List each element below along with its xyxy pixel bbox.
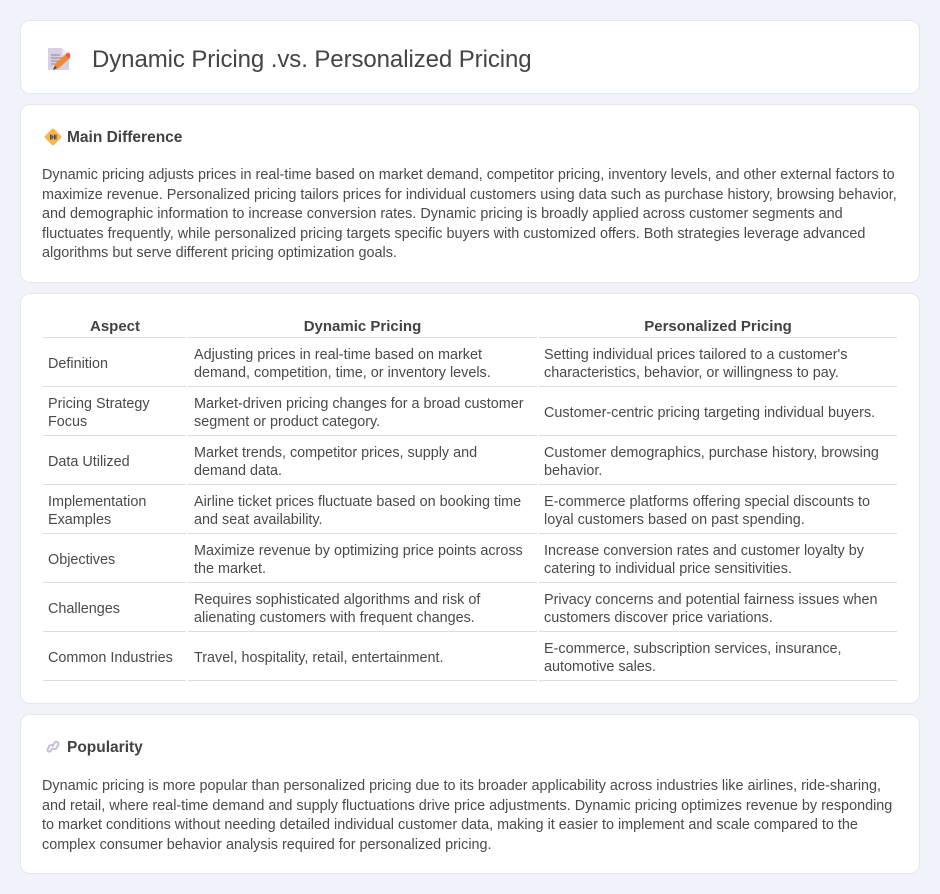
- table row: implementation examples: Implementation: [48, 494, 146, 510]
- table row: challenges: alienating customers with frequent changes.: [194, 610, 475, 626]
- table row: data utilized: Data Utilized: [48, 454, 130, 470]
- text block: main difference paragraph: [42, 167, 897, 261]
- text block: popularity paragraph: complex consumer behavior analysis required for personalized pricing.: [42, 836, 492, 852]
- panel: title header: [20, 20, 920, 94]
- text block: main difference paragraph: algorithms but serve different pricing optimization goals.: [42, 245, 397, 261]
- table row: pricing strategy focus: Pricing Strategy: [48, 396, 150, 412]
- table row: data utilized: behavior.: [544, 463, 602, 479]
- table header row: Aspect: [90, 318, 140, 335]
- table row: definition: Adjusting prices in real-time based on market: [194, 347, 482, 363]
- heading: popularity: Popularity: [67, 739, 143, 756]
- table header row: Dynamic Pricing: [304, 318, 421, 335]
- table row: implementation examples: [48, 494, 870, 528]
- text block: popularity paragraph: [42, 778, 892, 852]
- table row: implementation examples: Airline ticket prices fluctuate based on booking time: [194, 494, 521, 510]
- heading: main difference: Main Difference: [67, 129, 182, 146]
- table row: data utilized: demand data.: [194, 463, 282, 479]
- table row: definition: [48, 347, 848, 381]
- table header row: Personalized Pricing: [644, 318, 792, 335]
- table row: common industries: [48, 641, 842, 675]
- table row: implementation examples: E-commerce platforms offering special discounts to: [544, 494, 870, 510]
- table row: common industries: Travel, hospitality, retail, entertainment.: [194, 650, 444, 666]
- table row: data utilized: Customer demographics, purchase history, browsing: [544, 445, 879, 461]
- table row: objectives: Increase conversion rates and customer loyalty by: [544, 543, 864, 559]
- panel: comparison table: [20, 293, 920, 704]
- text block: main difference paragraph: and demographic information to increase conversion rates. Dynamic pricing is broadly applied across customer segments and: [42, 206, 843, 222]
- text block: popularity paragraph: to market conditions without needing detailed individual customer data, making it easier to implement and scale compared to the: [42, 817, 858, 833]
- table row: definition: Setting individual prices tailored to a customer's: [544, 347, 848, 363]
- table row: objectives: the market.: [194, 561, 266, 577]
- panel: popularity: [20, 714, 920, 874]
- text block: popularity paragraph: and retail, where real-time demand and supply fluctuations drive price adjustments. Dynamic pricing optimizes revenue by responding: [42, 798, 892, 814]
- text block: popularity paragraph: Dynamic pricing is more popular than personalized pricing due to its broader applicability across industries like airlines, ride-sharing,: [42, 778, 881, 794]
- panel: main difference: [20, 104, 920, 283]
- text block: main difference paragraph: fluctuates frequently, while personalized pricing targets specific buyers with customized offers. Both strategies leverage advanced: [42, 226, 865, 242]
- title: Dynamic Pricing .vs. Personalized Pricing: [92, 46, 532, 73]
- text block: main difference paragraph: Dynamic pricing adjusts prices in real-time based on market demand, competitor pricing, inventory levels, and other external factors to: [42, 167, 895, 183]
- table row: objectives: Objectives: [48, 552, 115, 568]
- icon: document with pencil: [48, 48, 70, 70]
- table row: implementation examples: Examples: [48, 512, 111, 528]
- table row: challenges: [48, 592, 878, 626]
- table row: objectives: catering to individual price sensitivities.: [544, 561, 792, 577]
- table row: common industries: automotive sales.: [544, 659, 656, 675]
- table row: challenges: Requires sophisticated algorithms and risk of: [194, 592, 480, 608]
- table row: definition: Definition: [48, 356, 108, 372]
- table row: pricing strategy focus: Market-driven pricing changes for a broad customer: [194, 396, 524, 412]
- table row: objectives: Maximize revenue by optimizing price points across: [194, 543, 523, 559]
- table row: pricing strategy focus: segment or product category.: [194, 414, 380, 430]
- table row: data utilized: Market trends, competitor prices, supply and: [194, 445, 477, 461]
- table row: common industries: Common Industries: [48, 650, 173, 666]
- table header row: [90, 318, 792, 335]
- table row: definition: characteristics, behavior, or willingness to pay.: [544, 365, 839, 381]
- icon: chain link: [46, 740, 60, 753]
- icon: diamond warning sign: [44, 128, 62, 146]
- table row: pricing strategy focus: [48, 396, 875, 430]
- table row: implementation examples: and seat availability.: [194, 512, 323, 528]
- table row: challenges: customers discover price variations.: [544, 610, 773, 626]
- text block: main difference paragraph: maximize revenue. Personalized pricing tailors prices for individual customers using data such as purchase history, browsing behavior,: [42, 186, 897, 202]
- table row: challenges: Privacy concerns and potential fairness issues when: [544, 592, 878, 608]
- table row: challenges: Challenges: [48, 601, 120, 617]
- table row: pricing strategy focus: Customer-centric pricing targeting individual buyers.: [544, 405, 875, 421]
- table row: pricing strategy focus: Focus: [48, 414, 87, 430]
- table row: definition: demand, competition, time, or inventory levels.: [194, 365, 491, 381]
- table row: data utilized: [48, 445, 879, 479]
- table row: common industries: E-commerce, subscription services, insurance,: [544, 641, 842, 657]
- table row: objectives: [48, 543, 864, 577]
- table row: implementation examples: loyal customers based on past spending.: [544, 512, 805, 528]
